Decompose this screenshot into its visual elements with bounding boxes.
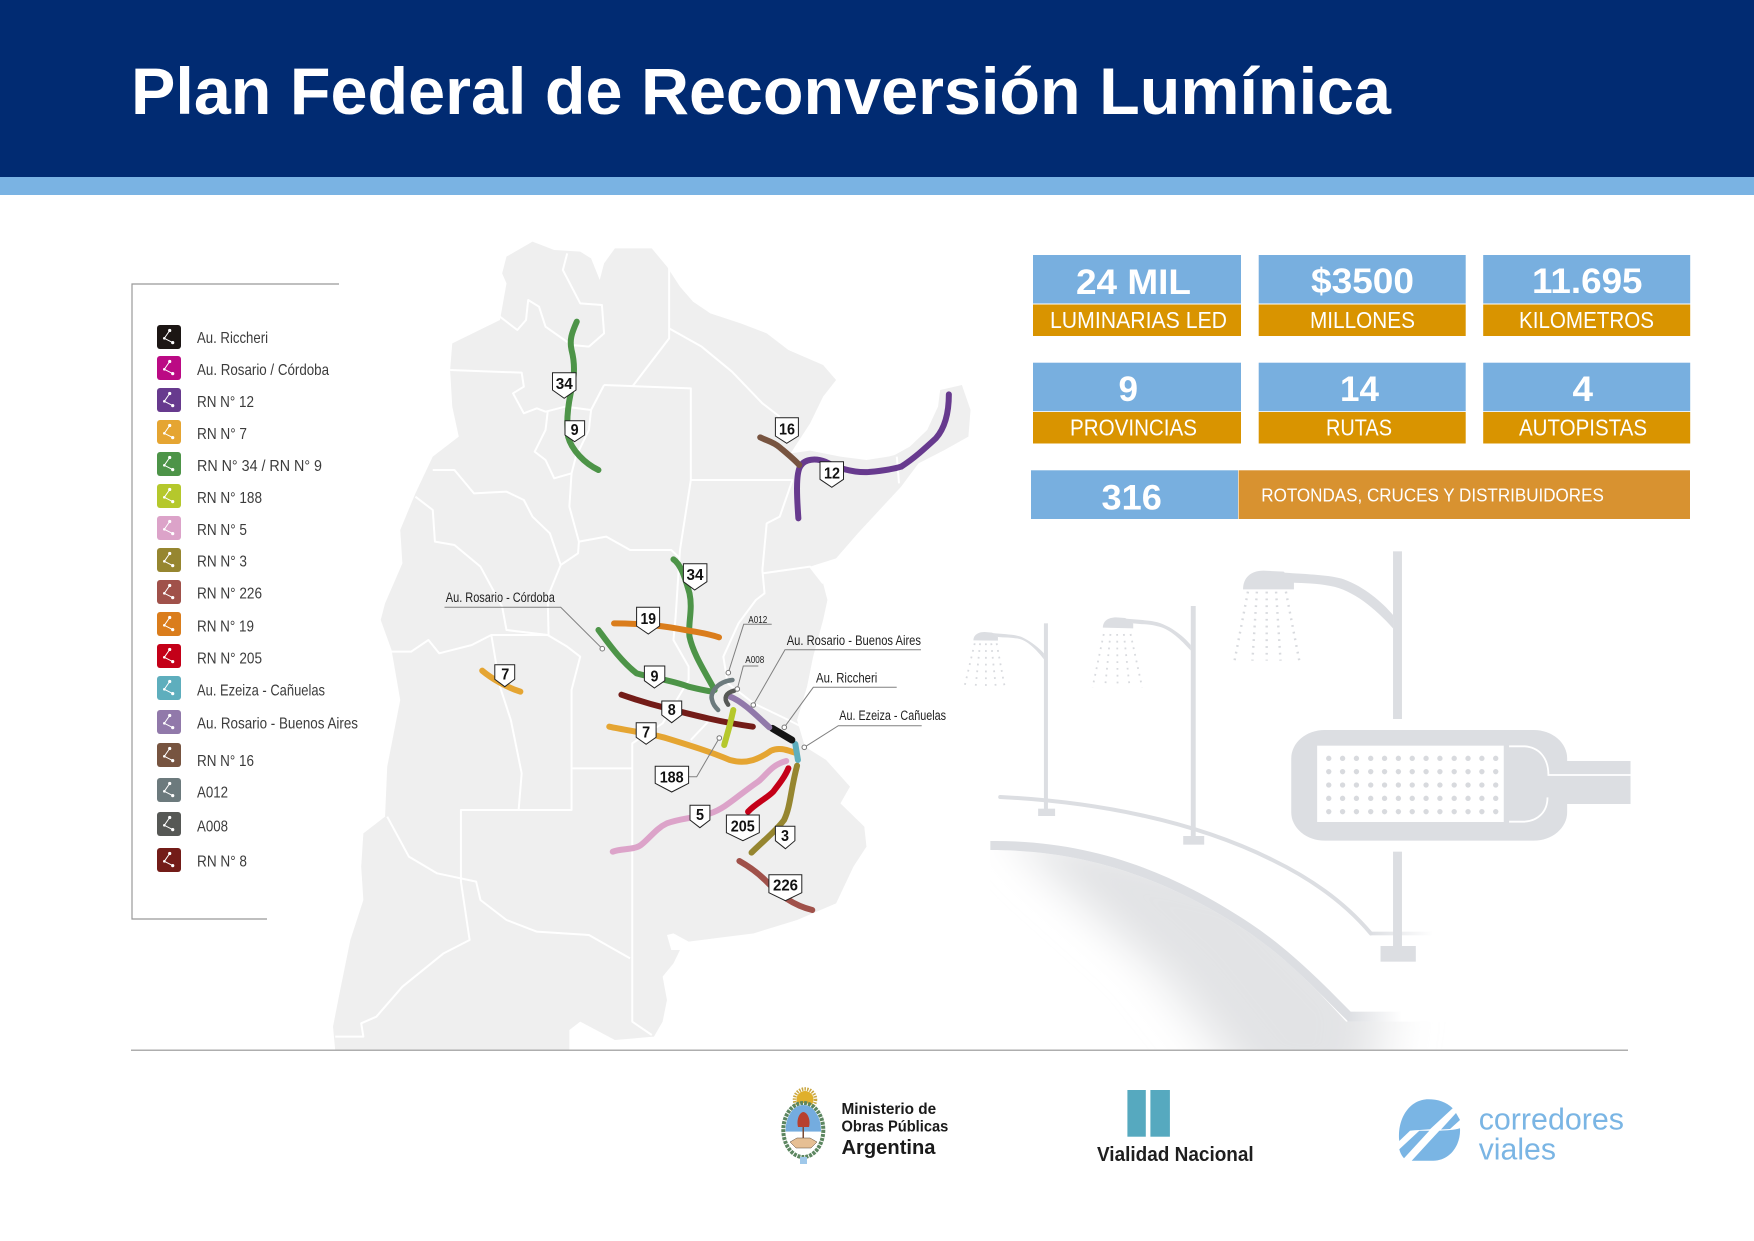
text: ministerio: Argentina bbox=[842, 1137, 936, 1159]
stat: 4 autopistas bbox=[1483, 363, 1690, 444]
shield 12 bbox=[820, 462, 844, 487]
logo: corredores viales bbox=[1399, 1099, 1624, 1166]
legend item: Au. Riccheri bbox=[157, 325, 268, 349]
route: RN 205 bbox=[748, 768, 788, 812]
stat: $3500 millones bbox=[1259, 255, 1466, 336]
legend item: RN 188 bbox=[157, 484, 262, 508]
legend item: Au. Riccheri: Au. Riccheri bbox=[197, 330, 268, 347]
legend item: RN 205 bbox=[157, 644, 262, 668]
legend item: RN 7: RN N° 7 bbox=[197, 426, 247, 443]
stat: 11.695 kilometros: KILOMETROS bbox=[1519, 307, 1654, 333]
stat: 316 rotondas, cruces y distribuidores: 316 bbox=[1102, 478, 1162, 517]
shield 5: 5 bbox=[696, 807, 704, 824]
icon: corredores mark bbox=[1399, 1099, 1460, 1161]
legend item: Au. Rosario - Buenos Aires: Au. Rosario - Buenos Aires bbox=[197, 716, 358, 732]
callout: Au. Rosario - Córdoba bbox=[444, 590, 605, 651]
stat: 24 mil luminarias LED: 24 MIL bbox=[1076, 263, 1191, 302]
shield 9 north bbox=[565, 421, 585, 442]
stat: 4 autopistas: 4 bbox=[1572, 370, 1594, 409]
stat: 11.695 kilometros: 11.695 bbox=[1532, 262, 1642, 301]
shield 205 bbox=[726, 815, 759, 841]
route: RN 16 bbox=[760, 437, 799, 465]
shield 9 north: 9 bbox=[571, 422, 579, 439]
route: Au. Ezeiza - Cañuelas bbox=[795, 744, 798, 760]
stat: 14 rutas: 14 bbox=[1340, 370, 1380, 409]
stat: 4 autopistas: AUTOPISTAS bbox=[1519, 415, 1647, 441]
map of Argentina with routes bbox=[333, 242, 971, 1050]
route: RN 8 bbox=[621, 695, 753, 727]
legend item: Au. Ezeiza - Cañuelas bbox=[157, 676, 325, 700]
legend item: Au. Ezeiza - Cañuelas: Au. Ezeiza - Cañuelas bbox=[197, 682, 325, 700]
shield 7 west: 7 bbox=[501, 666, 509, 683]
logo: corredores viales: corredores bbox=[1479, 1101, 1624, 1136]
logo: Vialidad Nacional bbox=[1097, 1090, 1254, 1166]
shield 9 south bbox=[644, 666, 665, 688]
shield 188: 188 bbox=[660, 769, 684, 786]
route: A008 bbox=[726, 691, 734, 705]
legend item: RN 5: RN N° 5 bbox=[197, 522, 247, 539]
shield 16: 16 bbox=[779, 421, 795, 438]
route: Au. Rosario - Buenos Aires bbox=[730, 697, 769, 727]
shield 12: 12 bbox=[824, 465, 840, 482]
route: RN 34 south bbox=[673, 559, 715, 690]
callout: Au. Riccheri: Au. Riccheri bbox=[816, 670, 877, 685]
road edge, far bbox=[1000, 797, 1371, 933]
province borders bbox=[335, 253, 899, 1037]
callout: Au. Riccheri bbox=[782, 670, 897, 730]
shield 226 bbox=[769, 875, 802, 901]
legend item: RN 12: RN N° 12 bbox=[197, 394, 254, 411]
stat: 14 rutas bbox=[1259, 363, 1466, 444]
route: RN 34 / RN 9 north bbox=[567, 322, 598, 470]
shield 3: 3 bbox=[781, 828, 789, 845]
icon: LED luminaire bbox=[1291, 730, 1631, 841]
shield 19 bbox=[637, 607, 660, 634]
legend item: RN 5 bbox=[157, 516, 247, 540]
lamp: small, far bbox=[964, 623, 1055, 816]
LED dots bbox=[1326, 756, 1498, 814]
illustration: street lamps and road bbox=[964, 551, 1631, 1080]
callout: A012 bbox=[726, 615, 772, 675]
legend item: RN 19: RN N° 19 bbox=[197, 618, 254, 636]
text: ministerio: Obras Públicas bbox=[842, 1118, 948, 1135]
leader lines and labels bbox=[444, 590, 946, 777]
stat: 14 rutas: RUTAS bbox=[1326, 415, 1392, 441]
legend item: A012 bbox=[157, 778, 228, 802]
legend item: RN 3 bbox=[157, 548, 247, 572]
route: RN 7 west bbox=[482, 671, 520, 692]
legend item: RN 226 bbox=[157, 580, 262, 604]
legend item: RN 8 bbox=[157, 848, 247, 872]
legend item: A008: A008 bbox=[197, 818, 228, 836]
shield 5 bbox=[690, 805, 710, 828]
shield 7 west bbox=[495, 665, 515, 687]
route: RN 19 bbox=[614, 623, 719, 637]
legend item: Au. Rosario / Córdoba bbox=[157, 356, 329, 380]
shield 34 south: 34 bbox=[686, 567, 704, 584]
shield 226: 226 bbox=[773, 878, 798, 895]
panel: key figures bbox=[1031, 255, 1690, 519]
logo: Ministerio de Obras Públicas bbox=[783, 1089, 948, 1164]
shield 205: 205 bbox=[731, 819, 755, 836]
legend item: Au. Rosario - Buenos Aires bbox=[157, 710, 358, 734]
callout: Au. Ezeiza - Cañuelas: Au. Ezeiza - Cañuelas bbox=[839, 708, 946, 723]
legend item: RN 8: RN N° 8 bbox=[197, 854, 247, 870]
route: RN 7 east bbox=[609, 727, 795, 762]
legend item: RN 226: RN N° 226 bbox=[197, 586, 262, 602]
callout: A012: A012 bbox=[748, 615, 768, 626]
shield 34 north bbox=[552, 373, 576, 398]
route: RN 188 bbox=[724, 710, 733, 745]
shield 16 bbox=[775, 418, 798, 443]
stat: 9 provincias: PROVINCIAS bbox=[1070, 415, 1197, 441]
icon: national coat of arms bbox=[783, 1089, 823, 1164]
legend item: A008 bbox=[157, 812, 228, 836]
route: Au. Riccheri bbox=[772, 728, 792, 740]
route shields bbox=[495, 373, 844, 901]
legend item: RN 12 bbox=[157, 388, 254, 412]
road shading bbox=[1022, 852, 1396, 1050]
stat: 24 mil luminarias LED bbox=[1033, 255, 1241, 336]
stat: 316 rotondas, cruces y distribuidores bbox=[1031, 470, 1690, 519]
shield 34 north: 34 bbox=[556, 376, 573, 393]
shield 9 south: 9 bbox=[650, 669, 659, 686]
panel: legend bbox=[132, 284, 358, 919]
header banner bbox=[0, 0, 1754, 195]
legend item: RN 3: RN N° 3 bbox=[197, 554, 247, 570]
callout: A008 bbox=[735, 655, 765, 691]
callout: Au. Ezeiza - Cañuelas bbox=[802, 708, 946, 750]
legend item: RN 16: RN N° 16 bbox=[197, 753, 254, 770]
text: ministerio: Ministerio de bbox=[842, 1101, 937, 1118]
stat: 11.695 kilometros bbox=[1483, 255, 1690, 336]
route: RN 12 bbox=[797, 394, 949, 518]
route: Au. Rosario - Córdoba / RN 9 bbox=[598, 630, 712, 692]
stat: $3500 millones: $3500 bbox=[1311, 262, 1414, 301]
map silhouette bbox=[333, 242, 971, 1050]
route: RN 3 bbox=[752, 766, 797, 853]
shield 34 south bbox=[683, 564, 707, 590]
callout: Au. Rosario - Córdoba: Au. Rosario - Córdoba bbox=[446, 590, 555, 605]
text: ministerio bbox=[842, 1101, 948, 1159]
logo: corredores viales: viales bbox=[1479, 1131, 1556, 1166]
shield 7 east bbox=[636, 723, 656, 744]
legend item: RN 7 bbox=[157, 420, 247, 444]
lamp: medium bbox=[1093, 606, 1204, 845]
legend item: A012: A012 bbox=[197, 784, 228, 802]
legend item: RN 188: RN N° 188 bbox=[197, 490, 262, 507]
callout: Au. Rosario - Buenos Aires bbox=[751, 633, 921, 707]
shield 188 bbox=[655, 766, 689, 792]
shield 8 bbox=[662, 701, 682, 723]
route: RN 226 bbox=[739, 861, 812, 910]
stat: 9 provincias: 9 bbox=[1118, 370, 1138, 409]
stat: $3500 millones: MILLONES bbox=[1310, 307, 1415, 333]
callout: RN 188 leader bbox=[689, 736, 722, 777]
title: Plan Federal de Reconversión Lumínica bbox=[131, 54, 1392, 128]
road edge, near bbox=[990, 841, 1351, 1022]
legend item: RN 205: RN N° 205 bbox=[197, 650, 262, 668]
callout: Au. Rosario - Buenos Aires: Au. Rosario - Buenos Aires bbox=[787, 633, 921, 648]
route: RN 5 bbox=[613, 761, 786, 852]
lamp: large bbox=[1235, 551, 1416, 962]
route: A012 bbox=[712, 680, 732, 710]
shield 3 bbox=[775, 826, 795, 849]
shield 8: 8 bbox=[668, 702, 676, 719]
callout: A008: A008 bbox=[745, 655, 765, 666]
shield 7 east: 7 bbox=[642, 725, 650, 742]
stat: 9 provincias bbox=[1033, 363, 1241, 444]
stat: 24 mil luminarias LED: LUMINARIAS LED bbox=[1050, 307, 1227, 333]
stat: 316 rotondas, cruces y distribuidores: ROTONDAS, CRUCES Y DISTRIBUIDORES bbox=[1261, 485, 1604, 506]
legend item: RN 19 bbox=[157, 612, 254, 636]
legend item: RN 16 bbox=[157, 743, 254, 770]
legend item: RN 34 / RN 9: RN N° 34 / RN N° 9 bbox=[197, 458, 322, 475]
legend item: RN 34 / RN 9 bbox=[157, 452, 322, 476]
logo: Vialidad Nacional: Vialidad Nacional bbox=[1097, 1144, 1254, 1166]
shield 19: 19 bbox=[640, 611, 656, 628]
legend item: Au. Rosario / Córdoba: Au. Rosario / Córdoba bbox=[197, 362, 329, 379]
